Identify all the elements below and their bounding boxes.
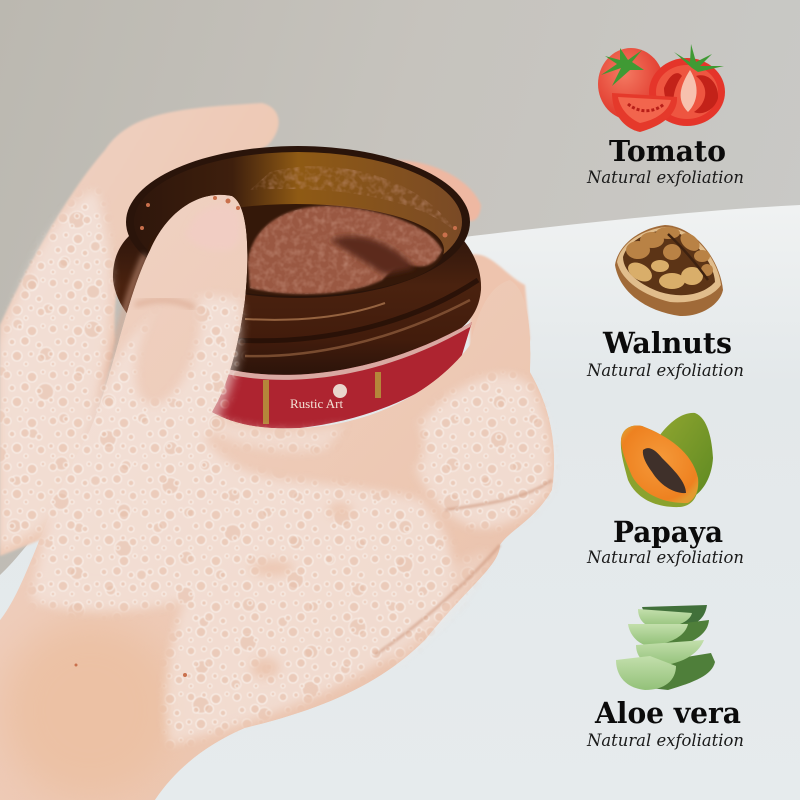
forearm	[0, 620, 180, 800]
caption: Natural exfoliation	[586, 361, 744, 381]
thumb crease	[135, 300, 195, 308]
jar	[113, 146, 481, 428]
ingredient: tomato	[586, 44, 744, 188]
foam	[0, 190, 554, 748]
front hand	[0, 195, 554, 800]
brand name: Rustic Art	[290, 396, 343, 411]
jar label	[208, 322, 472, 428]
heading: Papaya: Papaya	[613, 515, 723, 549]
icon: walnut	[615, 225, 723, 316]
thumbnail	[186, 205, 240, 251]
photo: hands holding scrub jar	[0, 102, 554, 800]
ingredient: walnuts	[586, 225, 744, 381]
caption: Natural exfoliation	[586, 168, 744, 188]
back hand	[0, 103, 530, 556]
jar rim	[126, 146, 470, 298]
heading: Aloe vera: Aloe vera	[594, 696, 741, 730]
caption: Natural exfoliation	[586, 548, 744, 568]
background: white tub	[0, 205, 800, 800]
scrub	[248, 206, 442, 294]
finger creases	[375, 480, 552, 655]
jar highlights	[245, 303, 385, 320]
jar body	[113, 225, 481, 377]
icon: aloe slices	[616, 605, 715, 690]
icon: tomatoes	[598, 44, 725, 132]
heading: Walnuts: Walnuts	[602, 326, 732, 360]
ingredient: aloe vera	[586, 605, 744, 751]
caption: Natural exfoliation	[586, 731, 744, 751]
thumb shadow on back hand	[85, 255, 145, 440]
icon: papaya	[621, 413, 713, 507]
scrub specks	[74, 196, 457, 677]
heading: Tomato: Tomato	[609, 134, 726, 168]
ingredient: papaya	[586, 413, 744, 568]
